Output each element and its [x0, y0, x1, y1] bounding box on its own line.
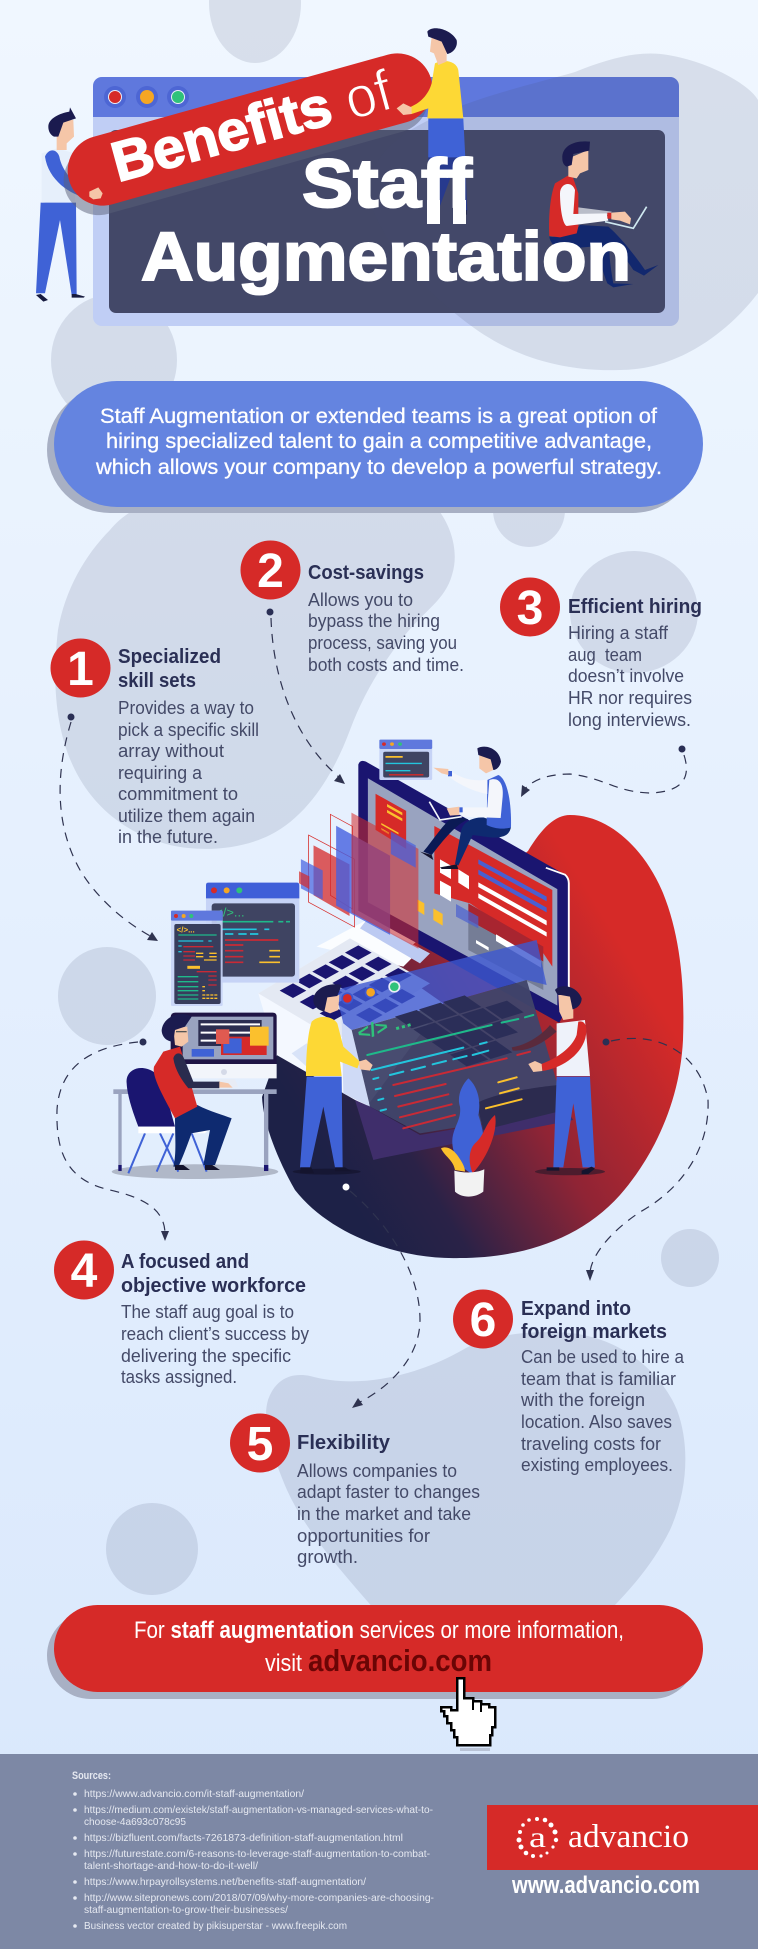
benefit 4: A focused and — [121, 1251, 249, 1273]
benefit 6: location. Also saves — [521, 1412, 672, 1432]
benefit 2: Allows you to — [308, 590, 413, 610]
sources list: https://medium.com/existek/staff-augmentation-vs-managed-services-what-to- — [84, 1804, 433, 1816]
banner: Benefits of: Benefits — [105, 73, 338, 194]
benefit 2 — [240, 540, 464, 675]
dashed arrow 2 — [266, 608, 345, 784]
monitor — [358, 761, 569, 1023]
laptop base and keyboard — [258, 920, 443, 1107]
benefit 1: commitment to — [118, 784, 238, 804]
header browser window — [93, 77, 679, 326]
plant — [441, 1078, 496, 1197]
call to action pill: visit — [265, 1650, 302, 1677]
benefit 5: growth. — [297, 1547, 358, 1567]
intro pill: which allows your company to develop a powerful strategy. — [95, 456, 662, 479]
benefit 2: both costs and time. — [308, 655, 464, 675]
background blob: top right — [369, 54, 758, 370]
benefit 4: tasks assigned. — [121, 1367, 237, 1387]
large tablet code window: </> ... — [355, 1010, 414, 1045]
benefit 6: 6 — [470, 1294, 496, 1347]
benefit 1: requiring a — [118, 763, 203, 783]
advancio logo: a — [529, 1821, 546, 1854]
benefit 5: adapt faster to changes — [297, 1482, 480, 1502]
benefit 1: Specialized — [118, 646, 221, 668]
benefit 2: bypass the hiring — [308, 611, 440, 631]
benefit 1: 1 — [67, 643, 94, 696]
benefit 6: Expand into — [521, 1298, 631, 1320]
intro pill: hiring specialized talent to gain a competitive advantage, — [106, 430, 652, 453]
sources list: talent-shortage-and-how-to-do-it-well/ — [84, 1860, 258, 1872]
icon: pointing hand cursor — [441, 1678, 495, 1751]
benefit 4 — [54, 1240, 309, 1387]
sources list: http://www.sitepronews.com/2018/07/09/why-more-companies-are-choosing- — [84, 1892, 434, 1904]
red gradient blob — [262, 815, 683, 1258]
person on top of monitor — [420, 747, 511, 869]
person: seated with laptop — [549, 141, 658, 287]
benefit 1: Provides a way to — [118, 698, 254, 718]
website url: www.advancio.com — [511, 1872, 700, 1899]
benefit 6: foreign markets — [521, 1321, 667, 1343]
benefit 5: opportunities for — [297, 1526, 430, 1546]
benefit 6: existing employees. — [521, 1455, 673, 1475]
person: holding banner left — [36, 107, 90, 302]
benefit 5: in the market and take — [297, 1504, 471, 1524]
dashed arrow 1 — [60, 714, 158, 941]
benefit 4: objective workforce — [121, 1275, 306, 1297]
code window large: </>... — [215, 906, 245, 920]
benefit 6 — [453, 1290, 685, 1475]
dashed arrow 5 — [342, 1184, 420, 1408]
benefit 6: Can be used to hire a — [521, 1347, 685, 1367]
person: yellow sweater on window — [397, 28, 467, 215]
dashed arrow 6 — [586, 1038, 708, 1281]
benefit 5: Allows companies to — [297, 1461, 457, 1481]
title: Staff Augmentation — [141, 145, 631, 295]
benefit 1: pick a specific skill — [118, 720, 259, 740]
sources list: choose-4a693c078c95 — [84, 1816, 186, 1828]
benefit 1: skill sets — [118, 670, 196, 692]
person at desk — [112, 1013, 278, 1179]
sources list — [72, 1770, 434, 1932]
benefit 2: 2 — [257, 545, 284, 598]
sources list: https://www.advancio.com/it-staff-augmentation/ — [84, 1788, 304, 1800]
floating translucent layers — [299, 813, 418, 949]
benefit 4: delivering the specific — [121, 1346, 291, 1366]
intro pill: Staff Augmentation or extended teams is a great option of — [100, 405, 657, 428]
code window small — [171, 911, 223, 1006]
person: red sleeves at tablet — [512, 986, 605, 1175]
benefit 6: with the foreign — [520, 1390, 645, 1410]
call to action pill: For staff augmentation services or more information, — [134, 1617, 624, 1644]
sources list: https://bizfluent.com/facts-7261873-definition-staff-augmentation.html — [84, 1832, 403, 1844]
background blobs — [51, 0, 719, 1610]
benefit 1 — [50, 638, 259, 847]
sources list: Sources: — [72, 1770, 111, 1782]
sources list: staff-augmentation-to-grow-their-businesses/ — [84, 1904, 288, 1916]
benefit 1: utilize them again — [118, 806, 255, 826]
sources list: https://futurestate.com/6-reasons-to-leverage-staff-augmentation-to-combat- — [84, 1848, 430, 1860]
benefit 5: 5 — [247, 1418, 273, 1471]
footer band — [0, 1754, 758, 1949]
banner: Benefits of — [56, 45, 440, 223]
person: hand on banner left — [89, 187, 103, 199]
advancio logo: advancio — [568, 1819, 689, 1855]
benefit 1: array without — [118, 741, 224, 761]
benefit 2: Cost-savings — [308, 562, 424, 584]
benefit 3: Efficient hiring — [568, 596, 702, 618]
benefit 6: traveling costs for — [521, 1434, 661, 1454]
person: yellow sweater at tablet — [293, 984, 373, 1175]
benefit 3: doesn’t involve — [568, 666, 684, 686]
monitor screen panel — [417, 826, 552, 990]
call to action pill — [47, 1605, 703, 1699]
benefit 3: Hiring a staff — [568, 623, 669, 643]
benefit 4: reach client’s success by — [121, 1324, 309, 1344]
code window small: </>... — [177, 925, 195, 934]
benefit 3 — [500, 578, 702, 730]
small code window on monitor — [379, 740, 432, 780]
dashed arrow 4 — [57, 1038, 169, 1241]
benefit 6: team that is familiar — [521, 1369, 676, 1389]
intro pill — [47, 381, 703, 513]
benefit 3: HR nor requires — [568, 688, 692, 708]
advancio logo — [487, 1805, 758, 1870]
sources list: https://www.hrpayrollsystems.net/benefits-staff-augmentation/ — [84, 1876, 366, 1888]
benefit 2: process, saving you — [308, 633, 457, 653]
benefit 3: aug team — [568, 645, 642, 665]
benefit 4: The staff aug goal is to — [121, 1302, 294, 1322]
banner: Benefits of: of — [337, 57, 400, 133]
benefit 3: long interviews. — [568, 710, 691, 730]
title: Staff Augmentation: Augmentation — [141, 218, 631, 295]
large tablet code window — [335, 940, 573, 1160]
code window large — [206, 883, 299, 983]
benefit 5: Flexibility — [297, 1432, 391, 1454]
benefit 3: 3 — [517, 582, 543, 635]
call to action pill: advancio.com — [308, 1643, 492, 1678]
dashed arrow 3 — [521, 746, 686, 797]
sources list: Business vector created by pikisuperstar - www.freepik.com — [84, 1920, 347, 1932]
title: Staff Augmentation: Staff — [302, 145, 473, 222]
benefit 1: in the future. — [118, 827, 218, 847]
benefit 4: 4 — [71, 1245, 98, 1298]
benefit 5 — [230, 1414, 480, 1567]
